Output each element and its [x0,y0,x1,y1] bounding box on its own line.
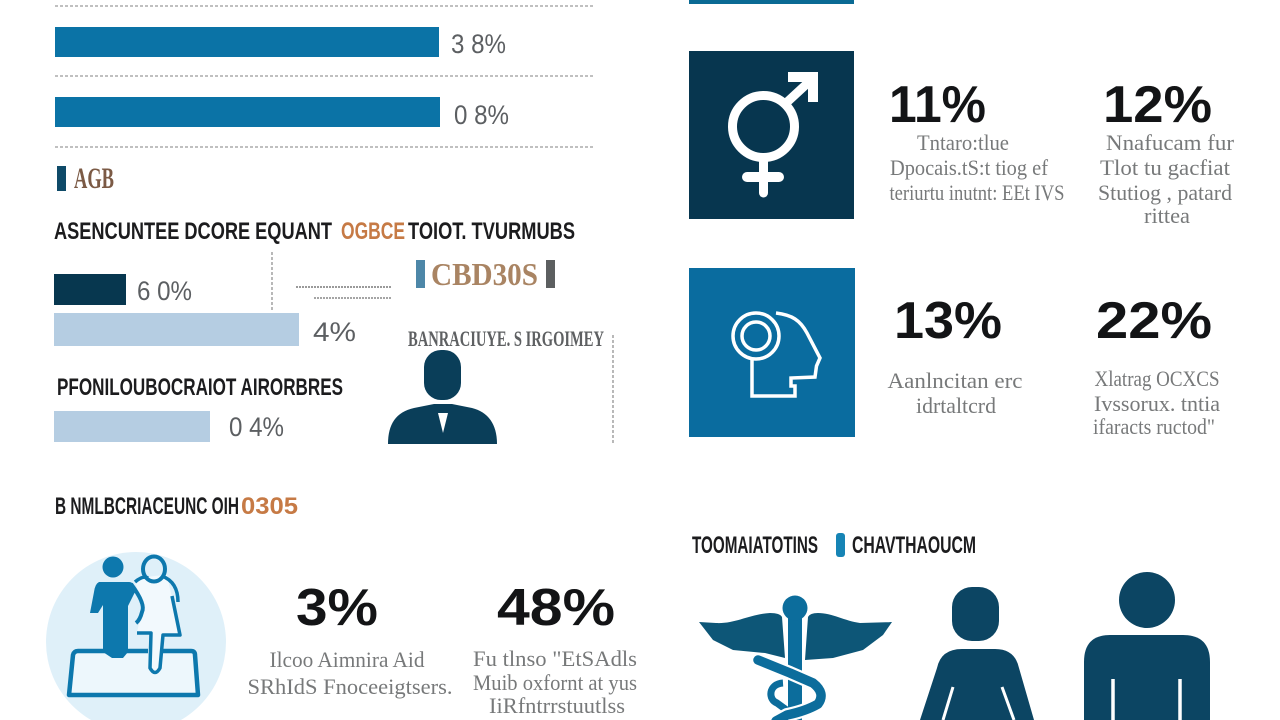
stat: 11%: teriurtu inutnt: EEt IVS [890,180,1064,205]
stat: 3%: SRhIdS Fnoceeigtsers. [248,674,452,699]
icon: couple on podium [46,552,226,720]
icon: gender symbol [689,51,854,219]
bar chart: degree bars: 4% [313,317,356,347]
heading: top contraction: TOOMAIATOTINS [692,532,818,559]
bar: professional [54,411,284,442]
stat: 13% [888,292,1023,418]
stat: 22%: ifaracts ructod" [1093,414,1215,439]
stat: 22% [1093,292,1220,439]
stat: 22%: Ivssorux. tntia [1094,391,1220,416]
stat: 12%: Stutiog , patard [1098,180,1232,205]
heading: associate degree: OGBCE [341,218,405,245]
stat: 3% [248,579,452,699]
stat: 22%: Xlatrag OCXCS [1094,366,1220,391]
stat: 11%: 11% [889,76,986,134]
stat: 48%: 48% [497,579,615,637]
stat: 12%: rittea [1144,203,1190,228]
stat: 12%: Nnafucam fur [1106,130,1235,155]
bar: professional: 0 4% [229,412,284,442]
heading: milestone: 0305 [241,493,298,520]
stat: 48% [473,579,637,718]
bar chart: degree bars [54,274,356,347]
heading: associate degree: TOIOT. TVURMUBS [408,218,575,245]
heading: associate degree: ASENCUNTEE DCORE EQUANT [54,218,332,245]
icon: caduceus [699,596,892,720]
stat: 48%: Fu tlnso "EtSAdls [473,646,637,671]
heading: milestone: B NMLBCRIACEUNC OIH [55,493,239,520]
stat: 3%: Ilcoo Aimnira Aid [270,647,424,672]
heading: top contraction: CHAVTHAOUCM [852,532,976,559]
legend: AGB [57,162,114,195]
stat: 3%: 3% [296,579,378,637]
icon: man figure [1084,572,1210,720]
stat: 12% [1098,76,1235,228]
stat: 22%: 22% [1096,292,1212,350]
stat: 13%: Aanlncitan erc [888,368,1023,393]
legend: CBD label: CBD30S [431,256,538,292]
heading: top contraction [692,532,976,559]
stat: 48%: IiRfntrrstuutlss [489,693,625,718]
stat: 11%: Dpocais.tS:t tiog ef [890,155,1049,180]
icon: woman figure [920,587,1034,720]
bar chart: top bars: 0 8% [454,100,509,130]
stat: 12%: Tlot tu gacfiat [1100,155,1230,180]
stat: 12%: 12% [1103,76,1212,134]
bar chart: top bars: 3 8% [451,29,506,59]
bar chart: degree bars: 6 0% [137,276,192,306]
stat: 11%: Tntaro:tlue [917,130,1009,155]
stat: 48%: Muib oxfornt at yus [473,670,637,695]
heading: professional: PFONILOUBOCRAIOT AIRORBRES [57,374,343,401]
icon: business person [388,350,497,444]
stat: 13%: idrtaltcrd [916,393,996,418]
stat: 11% [889,76,1064,205]
bar chart: top bars [55,27,509,130]
label: associate support: BANRACIUYE. S IRGOIMEY [408,326,604,351]
legend: AGB: AGB [74,162,114,195]
stat: 13%: 13% [894,292,1002,350]
icon: head with target [689,268,855,437]
bar top right [689,0,854,4]
